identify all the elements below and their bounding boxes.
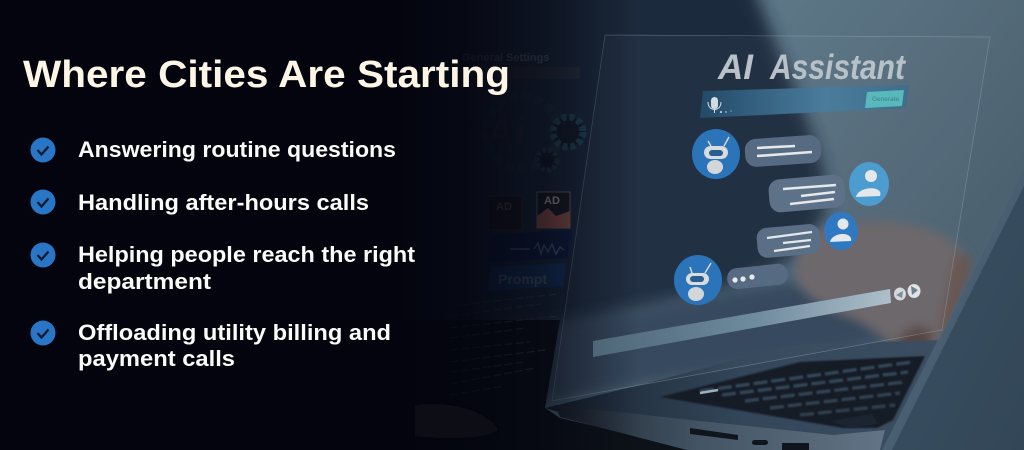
laptop lid <box>884 170 1024 450</box>
faint left-side interface <box>450 52 583 395</box>
checklist <box>30 137 416 371</box>
prompt button: Prompt <box>498 271 547 287</box>
AI Assistant label <box>717 48 906 87</box>
generate button: Generate <box>872 96 899 103</box>
AD image cards: AD <box>496 201 512 213</box>
title: Where Cities Are Starting <box>23 54 510 96</box>
dark desk area <box>200 320 700 450</box>
generate button <box>865 90 904 108</box>
back arrow button <box>894 288 906 300</box>
microphone icon <box>708 97 721 113</box>
user avatar 2 <box>824 212 858 250</box>
voice input bar <box>700 85 909 118</box>
robot avatar 1 <box>692 129 740 179</box>
audio waveform <box>488 230 572 262</box>
laptop <box>545 170 1024 450</box>
item 3: department <box>78 269 212 294</box>
forward arrow button <box>908 284 920 298</box>
prompt button <box>488 263 566 291</box>
laptop front edge <box>555 405 885 450</box>
AD image cards <box>488 192 570 230</box>
laptop deck <box>545 340 945 450</box>
user avatar 1 <box>849 162 889 206</box>
check icon 4 <box>30 320 56 346</box>
chat bubble 4 <box>726 263 789 290</box>
item 2: Handling after-hours calls <box>78 190 369 215</box>
hand <box>795 221 970 360</box>
AI gears <box>484 96 583 170</box>
AI Assistant screen <box>593 48 920 357</box>
AI gears: Ai <box>484 110 526 154</box>
check icon 3 <box>30 242 56 268</box>
AI Assistant label: Assistant <box>769 48 906 87</box>
left dark fade overlay <box>0 0 640 450</box>
glass panel <box>552 35 990 401</box>
lower glass glow <box>540 280 900 405</box>
robot avatar 2 <box>674 255 722 305</box>
item 4: Offloading utility billing and <box>78 320 391 345</box>
item 4: payment calls <box>78 346 235 371</box>
AI Assistant label: AI <box>717 48 754 87</box>
item 4 <box>30 320 391 371</box>
ports <box>690 428 809 450</box>
code lines <box>450 294 558 395</box>
chat bubble 1 <box>744 134 822 168</box>
chat bubble 3 <box>756 223 821 259</box>
keyboard <box>660 356 925 428</box>
dim object at bottom <box>415 404 498 438</box>
check icon 1 <box>30 138 56 162</box>
settings label: General Settings <box>462 52 549 64</box>
person silhouette <box>200 0 827 335</box>
item 1: Answering routine questions <box>78 137 396 162</box>
text entry bar <box>593 289 891 357</box>
item 3: Helping people reach the right <box>78 242 416 267</box>
check icon 2 <box>30 190 56 214</box>
chat bubble 2 <box>768 174 846 213</box>
item 3 <box>30 242 416 294</box>
AD image cards: AD <box>544 195 560 207</box>
